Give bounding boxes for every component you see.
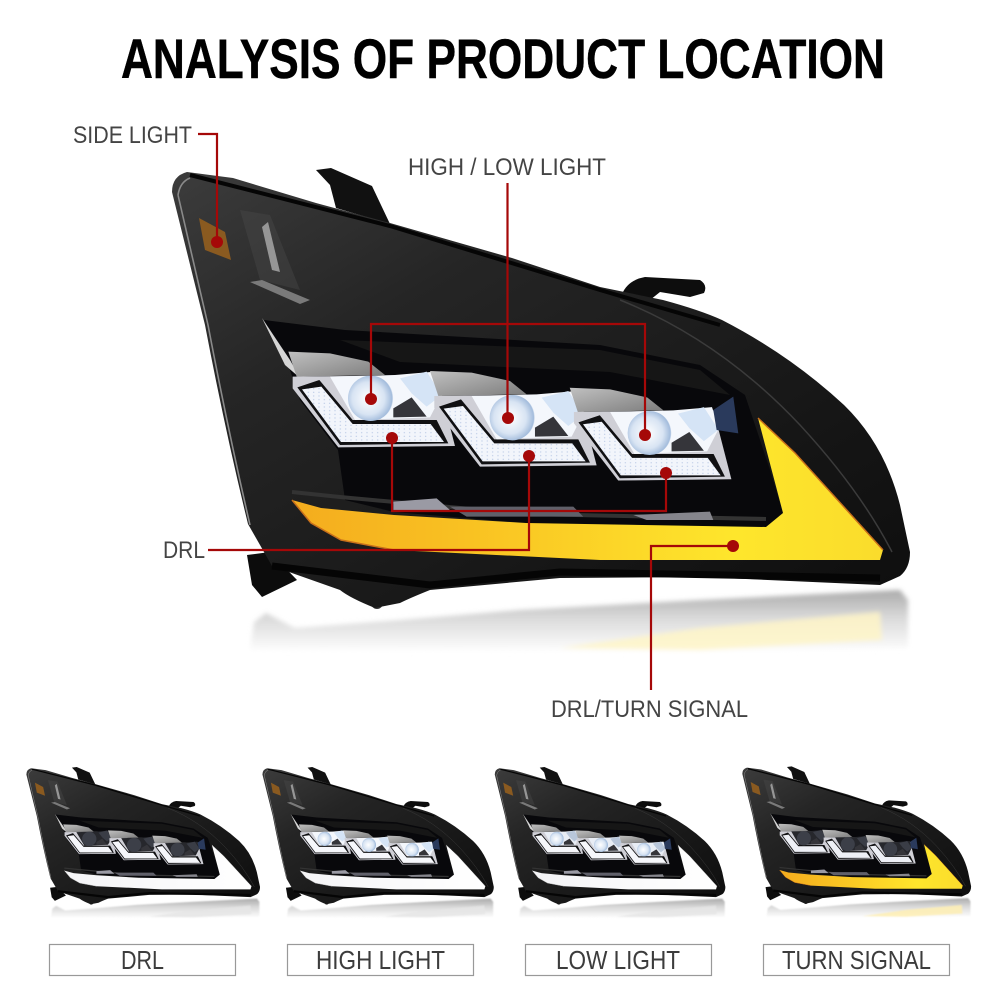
callout: DRL / turn signal: DRL/TURN SIGNAL [551,696,748,723]
callout: DRL: DRL [163,537,205,564]
callout: side light: SIDE LIGHT [73,122,192,149]
thumbnail: low light state [495,767,725,918]
caption box: DRL [50,944,236,976]
callout: DRL / turn signal [551,540,748,723]
main headlamp photo [172,168,910,652]
caption box: high light: HIGH LIGHT [316,945,445,975]
thumbnail: high light state [262,767,494,918]
callout: DRL [163,432,672,564]
callout: high / low light [365,154,651,441]
thumbnail: turn signal state [742,766,971,917]
caption box: low light: LOW LIGHT [556,945,680,975]
thumbnail: DRL state [26,767,260,918]
caption box: DRL: DRL [121,945,164,975]
callout: side light [73,122,223,248]
caption box: turn signal: TURN SIGNAL [782,945,931,975]
callout: high / low light: HIGH / LOW LIGHT [408,154,606,181]
